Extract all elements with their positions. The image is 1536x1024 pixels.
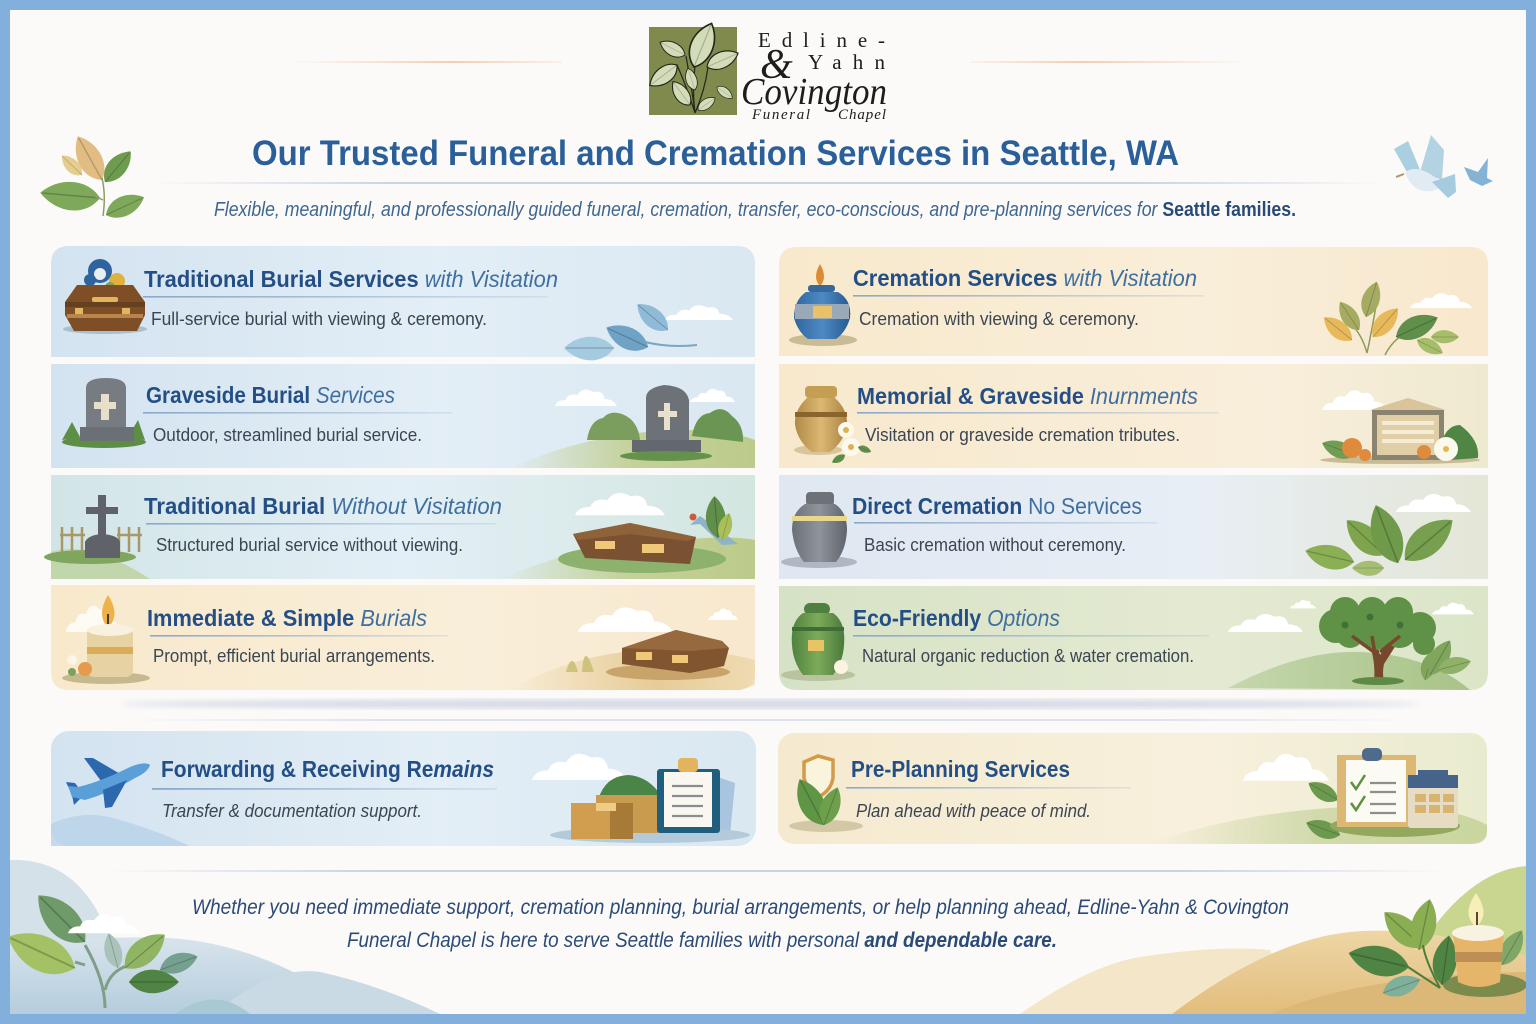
icon: airplane [66, 758, 150, 808]
heading: Pre-Planning Services [851, 756, 1070, 782]
logo wordmark [741, 28, 887, 123]
heading: Forwarding & Receiving Remains [161, 756, 494, 782]
logo wordmark: Yahn [808, 50, 886, 74]
decoration: niche wall with flowers [1319, 390, 1480, 464]
logo wordmark: Chapel [838, 107, 886, 123]
decoration: green leaves [1302, 494, 1471, 576]
logo wordmark: Edline- [758, 28, 885, 52]
decoration: casket on sand [510, 607, 755, 690]
decoration: hill, headstone, bushes [510, 385, 755, 468]
panel: memorial and graveside inurnments [779, 364, 1488, 468]
panel: direct cremation no services [779, 475, 1488, 579]
footer landscape: left blue hills [10, 860, 440, 1014]
panel: immediate and simple burials [51, 585, 755, 690]
description: Basic cremation without ceremony. [864, 534, 1126, 555]
icon: grey urn [781, 492, 857, 568]
description: Cremation with viewing & ceremony. [859, 308, 1139, 329]
title: Our Trusted Funeral and Cremation Services in Seattle, WA [252, 134, 1179, 173]
description: Visitation or graveside cremation tributes. [865, 424, 1180, 445]
heading: Graveside Burial Services [146, 382, 395, 408]
icon: blue urn with flame [789, 264, 857, 346]
description: Natural organic reduction & water cremation. [862, 645, 1194, 666]
logo wordmark: Funeral [751, 107, 810, 123]
decoration: casket on hill [51, 493, 755, 579]
decoration: boxes and clipboard [51, 754, 750, 846]
decorative footer rule [105, 870, 1450, 872]
subtitle: Flexible, meaningful, and professionally guided funeral, cremation, transfer, eco-conscious, and pre-planning services for Seattle families. [214, 199, 1296, 221]
panel: traditional burial services with visitation [51, 246, 755, 360]
icon: cross and fence [44, 495, 142, 564]
footer landscape: right tan and green hills [1020, 866, 1526, 1014]
description: Plan ahead with peace of mind. [856, 800, 1091, 821]
panel: forwarding and receiving remains [51, 731, 756, 846]
icon: shield and leaves [788, 756, 863, 832]
icon: candle with flowers [62, 595, 150, 684]
logo wordmark: Covington [741, 71, 887, 113]
icon: casket with flowers [63, 259, 147, 334]
icon: tan urn with flowers [794, 386, 872, 466]
icon: doves top right [1394, 135, 1493, 198]
decoration: clipboard and calendar [1150, 748, 1487, 844]
icon: footer left plant with cloud [0, 885, 201, 1008]
logo wordmark: & [760, 42, 793, 88]
heading: Eco-Friendly Options [853, 605, 1060, 631]
decorative rule left of logo [290, 61, 562, 63]
icon: corner leaves top left [39, 131, 148, 224]
footer message: Whether you need immediate support, cremation planning, burial arrangements, or help planning ahead, Edline-Yahn & Covington [192, 896, 1289, 919]
panel: cremation services with visitation [779, 247, 1488, 359]
decoration: blue leaves and cloud [564, 297, 733, 360]
description: Full-service burial with viewing & ceremony. [151, 308, 487, 329]
panel: traditional burial without visitation [44, 475, 755, 579]
blurred band divider [120, 699, 1420, 709]
logo plant square [645, 19, 741, 115]
icon: footer right candle with leaves [1345, 893, 1530, 1001]
heading: Direct Cremation No Services [852, 493, 1142, 519]
heading: Memorial & Graveside Inurnments [857, 383, 1198, 409]
description: Prompt, efficient burial arrangements. [153, 645, 435, 666]
panel: pre-planning services [778, 733, 1487, 844]
footer message: Funeral Chapel is here to serve Seattle families with personal and dependable care. [347, 929, 1057, 952]
heading: Cremation Services with Visitation [853, 265, 1197, 291]
logo [645, 19, 887, 123]
heading: Traditional Burial Services with Visitation [144, 266, 558, 292]
description: Outdoor, streamlined burial service. [153, 424, 422, 445]
icon: green urn [781, 603, 855, 681]
heading: Immediate & Simple Burials [147, 605, 427, 631]
footer message [192, 896, 1289, 952]
decoration: autumn leaves [1318, 279, 1472, 359]
decoration: tree on hill [1228, 597, 1474, 690]
description: Structured burial service without viewing. [156, 534, 463, 555]
description: Transfer & documentation support. [162, 800, 422, 821]
heading: Traditional Burial Without Visitation [144, 493, 502, 519]
panel: graveside burial services [51, 364, 755, 468]
decorative rule right of logo [970, 61, 1250, 63]
icon: headstone with grass [62, 378, 146, 448]
panel: eco-friendly options [779, 586, 1488, 690]
